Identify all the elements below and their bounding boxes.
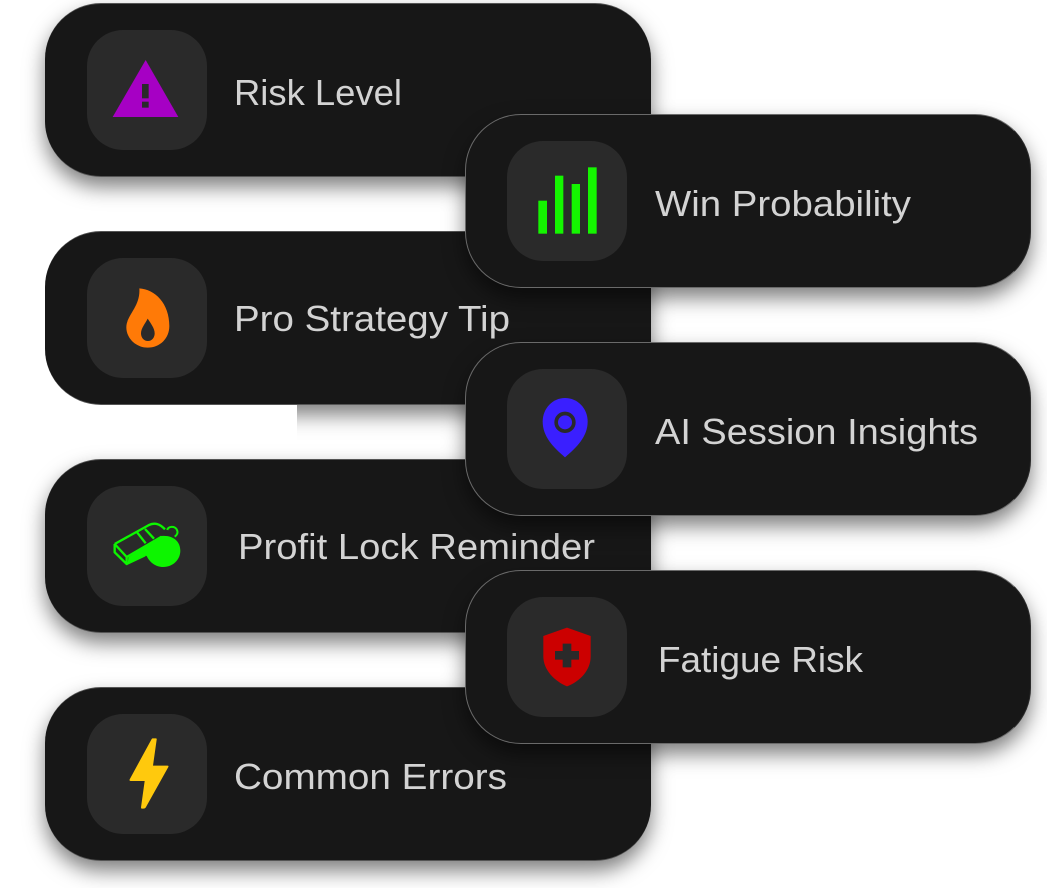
icon: signal bars	[507, 141, 627, 261]
card: Profit Lock Reminder	[45, 459, 651, 633]
label: Win Probability: Win Probability	[655, 183, 912, 224]
label: Risk Level: Risk Level	[234, 72, 402, 113]
card: Risk Level	[45, 3, 651, 177]
label: Common Errors: Common Errors	[234, 756, 507, 797]
card: Common Errors	[45, 687, 651, 861]
card: Pro Strategy Tip	[45, 231, 651, 405]
shadow: Pro Strategy card (clipped)	[297, 288, 666, 430]
card: AI Session Insights	[465, 342, 1031, 516]
label: Pro Strategy Tip: Pro Strategy Tip	[234, 298, 510, 339]
icon: flame	[87, 258, 207, 378]
label: AI Session Insights: AI Session Insights	[655, 411, 978, 452]
label: Fatigue Risk: Fatigue Risk	[658, 639, 864, 680]
icon: lightning bolt	[87, 714, 207, 834]
card: Win Probability	[465, 114, 1031, 288]
icon: medical shield	[507, 597, 627, 717]
icon: warning triangle	[87, 30, 207, 150]
icon: whistle	[87, 486, 207, 606]
label: Profit Lock Reminder: Profit Lock Reminder	[238, 526, 595, 567]
card: Fatigue Risk	[465, 570, 1031, 744]
icon: map pin	[507, 369, 627, 489]
